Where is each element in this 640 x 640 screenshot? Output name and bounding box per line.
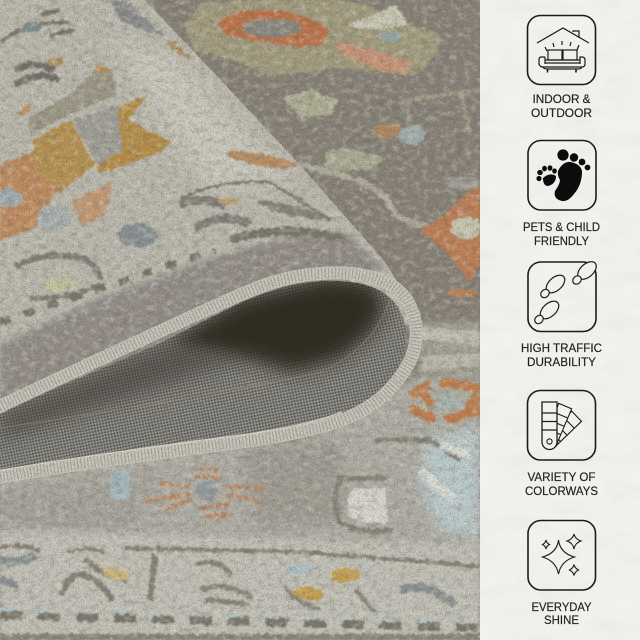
feature panel	[480, 0, 640, 640]
motif: bands and orange flower beside the fold	[375, 326, 480, 500]
icon: house with sofa	[537, 28, 589, 72]
motif: scrolls near the fold	[0, 148, 345, 338]
rug fibre grain	[0, 0, 480, 640]
rug floor background	[0, 0, 480, 640]
label: indoor and outdoor: INDOOR &	[532, 92, 590, 106]
label: high traffic durability	[521, 341, 602, 369]
icon: sparkles	[542, 534, 581, 576]
motif: bottom orange flower	[146, 468, 270, 516]
label: everyday shine	[532, 600, 592, 627]
motif: tan and orange medallion	[185, 0, 440, 76]
motif: gold and orange medallion	[0, 68, 172, 240]
feature: pets and child friendly	[523, 140, 600, 248]
label: high traffic durability: HIGH TRAFFIC	[521, 341, 602, 355]
label: pets and child friendly	[523, 220, 600, 248]
icon: colour swatch fan	[542, 402, 581, 451]
label: variety of colorways: COLORWAYS	[525, 484, 598, 498]
feature: indoor and outdoor	[528, 16, 596, 120]
feature: high traffic durability	[521, 258, 602, 369]
label: everyday shine: SHINE	[544, 613, 579, 627]
icon: child foot and paw prints	[536, 149, 590, 201]
feature: everyday shine	[528, 520, 596, 627]
rug back fabric and dark underside	[0, 278, 406, 470]
motif: roll top scrolls	[0, 0, 191, 85]
icon: shoe prints	[533, 258, 600, 325]
motif: pale green blooms and vine	[283, 90, 480, 226]
feature: variety of colorways	[525, 390, 598, 498]
motif: right orange flower	[420, 176, 481, 297]
rug pile mottling	[0, 0, 480, 640]
roll motifs	[0, 0, 345, 338]
label: high traffic durability: DURABILITY	[527, 355, 596, 369]
motif: bottom border scrolls	[0, 470, 480, 640]
rolled rug surface	[0, 0, 423, 420]
rug photograph	[0, 0, 481, 640]
label: everyday shine: EVERYDAY	[532, 600, 592, 614]
label: variety of colorways	[525, 470, 598, 498]
floor motifs	[0, 0, 481, 640]
label: indoor and outdoor: OUTDOOR	[531, 106, 592, 120]
rug edge binding	[0, 273, 416, 478]
label: pets and child friendly: FRIENDLY	[534, 234, 589, 248]
label: indoor and outdoor	[531, 92, 592, 120]
label: pets and child friendly: PETS & CHILD	[523, 220, 600, 234]
label: variety of colorways: VARIETY OF	[528, 470, 596, 484]
